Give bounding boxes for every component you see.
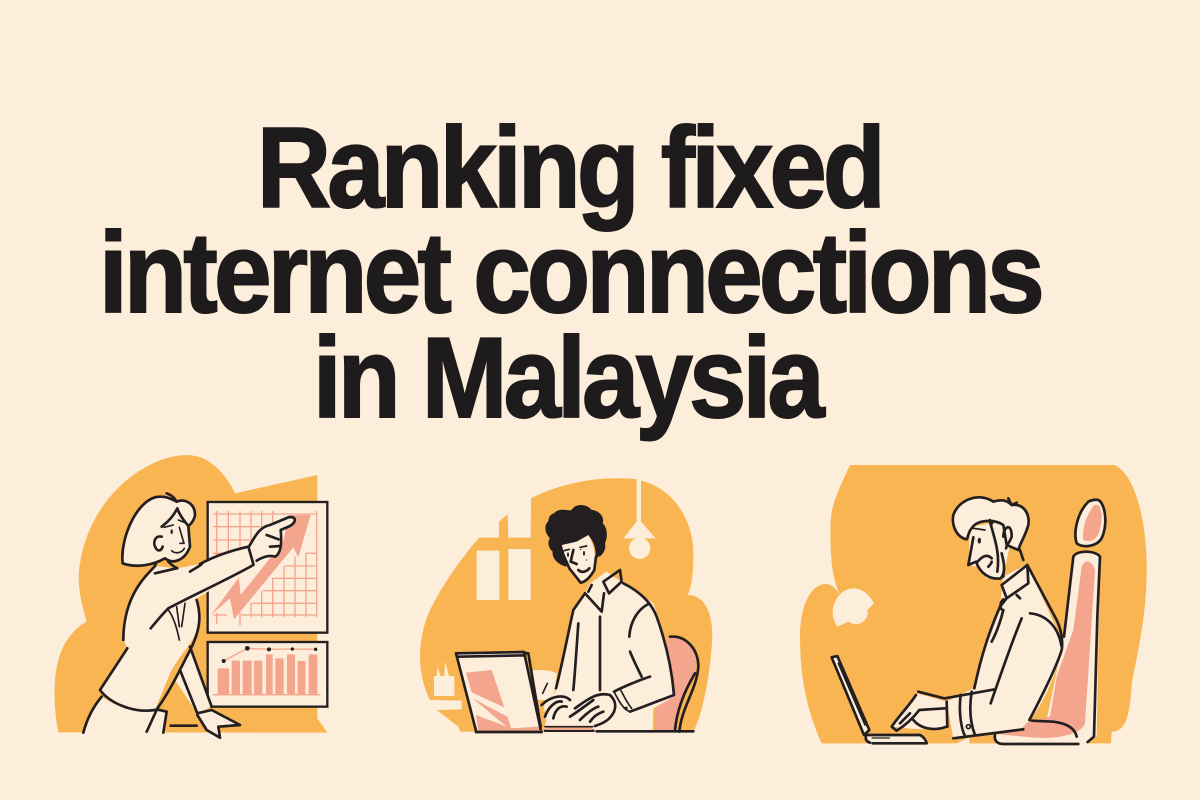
orange background blob [800,465,1147,743]
illustration: woman pointing at charts [55,455,327,738]
title: Ranking fixed [257,105,882,232]
title [99,105,1041,442]
line chart panel with rising arrow [208,502,327,633]
pencil cup and mug [434,662,557,700]
windows [477,549,531,600]
woman figure [83,493,295,738]
hanging lamp [623,479,656,559]
laptop [456,652,693,732]
bar chart panel [208,642,327,707]
man figure [542,505,674,731]
illustration: man typing in office chair [800,465,1147,744]
chair [655,637,698,732]
title: internet connections [99,210,1041,337]
laptop [832,656,927,743]
office chair [994,500,1105,744]
orange background blob [420,478,712,732]
man figure [892,497,1062,738]
orange background blob [55,455,327,733]
cream wall shape [833,588,874,627]
illustration: man at laptop with lamp [420,478,712,732]
title: in Malaysia [313,315,826,442]
